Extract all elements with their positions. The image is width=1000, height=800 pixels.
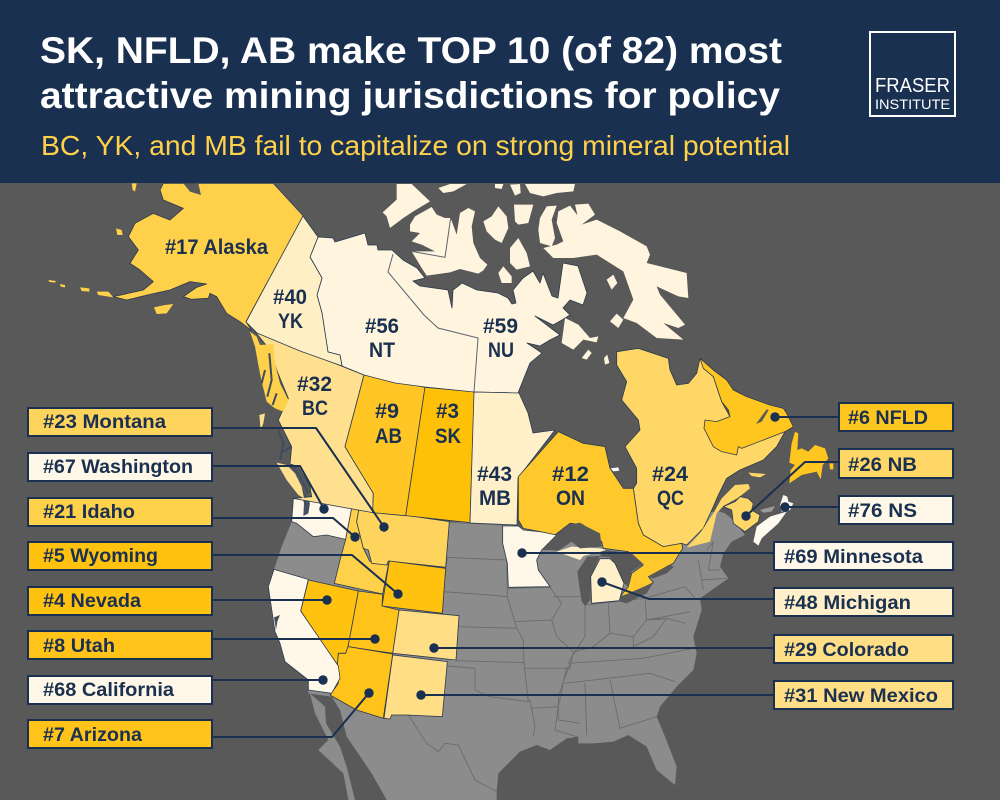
Michigan upper peninsula [557,547,607,560]
Ontario rank: ON [556,487,585,510]
Northwest Territories rank [365,315,399,362]
label: California: #68 California [43,680,174,701]
leader: Montana [212,428,389,532]
Utah [348,591,399,653]
Arizona [330,647,393,718]
British Columbia rank [297,373,332,420]
label: Utah [28,631,212,659]
logo: Fraser Institute: FRASER [875,74,950,97]
label: Nova Scotia: #76 NS [848,501,917,522]
label: Minnesota [774,542,953,570]
Nunavut rank [483,315,518,362]
label: Nevada [28,587,212,615]
United States and Mexico base [268,508,745,800]
title line two: attractive mining jurisdictions for policy [40,75,780,116]
Alaska [48,183,303,331]
title: SK, NFLD, AB make TOP 10 (of 82) most [40,30,782,71]
Minnesota [503,526,557,587]
label: Nova Scotia [839,496,953,524]
Lake Superior [542,523,602,551]
label: New Brunswick: #26 NB [848,455,917,476]
Nunavut rank: NU [488,339,514,362]
leader: Washington [212,466,329,514]
Colorado [393,610,459,660]
Saskatchewan rank: SK [435,425,461,448]
leader: Minnesota [517,548,773,558]
label: Montana [28,408,212,436]
Washington [292,498,352,539]
British Columbia rank: #32 [297,373,332,396]
left labels [28,408,212,748]
map labels [165,236,688,510]
header band [0,0,1000,183]
Alberta rank: AB [375,425,402,448]
eastern state lines [558,542,727,735]
Michigan lower peninsula [591,559,624,603]
leader: Idaho [212,518,360,542]
Northwest Territories and Nunavut [310,233,587,393]
logo: Fraser Institute [870,32,955,116]
label: Arizona [28,720,212,748]
Lake Michigan [577,556,600,606]
Wyoming [382,561,446,613]
Northwest Territories rank: #56 [365,315,399,338]
Alaska rank: #17 Alaska [165,236,268,259]
label: Colorado: #29 Colorado [784,640,909,661]
leader: Colorado [429,643,773,653]
Manitoba rank: MB [479,487,511,510]
Northwest Territories rank: NT [369,339,395,362]
label: Colorado [774,635,953,663]
Idaho [334,508,388,594]
Arctic islands [383,184,688,365]
label: Minnesota: #69 Minnesota [784,547,923,568]
leader: Wyoming [212,555,403,599]
Manitoba [470,392,555,525]
Quebec [617,348,785,547]
New Brunswick [723,497,760,532]
Ontario rank: #12 [552,463,589,486]
Lake Erie [620,583,653,603]
Alberta [345,375,425,516]
leader: Arizona [212,688,374,737]
Yukon rank [273,286,307,333]
label: New Mexico [774,681,953,709]
label: Newfoundland [839,403,953,431]
Montana [357,508,449,567]
Manitoba rank [477,463,512,510]
Quebec rank: QC [657,487,684,510]
label: New Mexico: #31 New Mexico [784,686,938,707]
subtitle: BC, YK, and MB fail to capitalize on strong mineral potential [41,130,790,161]
Saskatchewan rank [435,400,461,448]
label: Washington: #67 Washington [43,457,193,478]
Nova Scotia [753,512,787,546]
label: New Brunswick [839,449,953,478]
Yukon [246,216,342,366]
label: Wyoming: #5 Wyoming [43,546,158,567]
British Columbia rank: BC [302,397,328,420]
Manitoba rank: #43 [477,463,512,486]
Quebec rank: #24 [652,463,688,486]
label: California [28,676,212,704]
label: Wyoming [28,542,212,570]
leader: California [212,675,328,685]
Yukon rank: YK [278,310,303,333]
San Francisco Bay [274,615,280,630]
label: Arizona: #7 Arizona [43,725,142,746]
Saskatchewan rank: #3 [436,400,459,423]
western states [268,480,459,719]
Saskatchewan [406,387,474,523]
label: Idaho [28,498,212,526]
label: Utah: #8 Utah [43,636,115,657]
label: Newfoundland: #6 NFLD [848,408,928,429]
Quebec rank [652,463,688,510]
Vancouver Island [277,463,304,498]
label: Idaho: #21 Idaho [43,502,135,523]
leader: Newfoundland [770,412,838,422]
Alberta rank [375,400,402,448]
leader: Michigan [597,577,773,599]
logo: Fraser Institute: INSTITUTE [875,97,950,112]
Puget Sound [298,480,310,516]
Alaska panhandle [250,332,288,412]
label: Michigan [774,588,953,616]
label: Montana: #23 Montana [43,412,166,433]
Yukon rank: #40 [273,286,307,309]
leader: New Mexico [416,690,773,700]
label: Washington [28,453,212,481]
Lake Ontario [648,565,674,578]
territorial border [388,254,478,392]
leader: Nova Scotia [780,502,838,512]
eastern Canada and Great Lakes [503,348,833,606]
Ontario [518,432,683,597]
California [268,569,340,693]
right labels [774,403,953,709]
leader: New Brunswick [741,462,838,521]
British Columbia [255,332,373,513]
western Canada [250,332,474,523]
Ontario rank [552,463,589,510]
Newfoundland and Labrador [700,358,793,455]
label: Nevada: #4 Nevada [43,591,141,612]
New Mexico [384,655,447,719]
leader: Utah [212,634,380,644]
Nunavut rank: #59 [483,315,518,338]
Nevada [301,580,358,666]
Haida Gwaii [259,413,265,430]
Lake Huron [600,550,643,587]
leader lines and dots [212,412,838,737]
Alberta rank: #9 [375,400,399,423]
label: Michigan: #48 Michigan [784,593,911,614]
leader: Nevada [212,595,332,605]
map: North America [48,183,833,800]
